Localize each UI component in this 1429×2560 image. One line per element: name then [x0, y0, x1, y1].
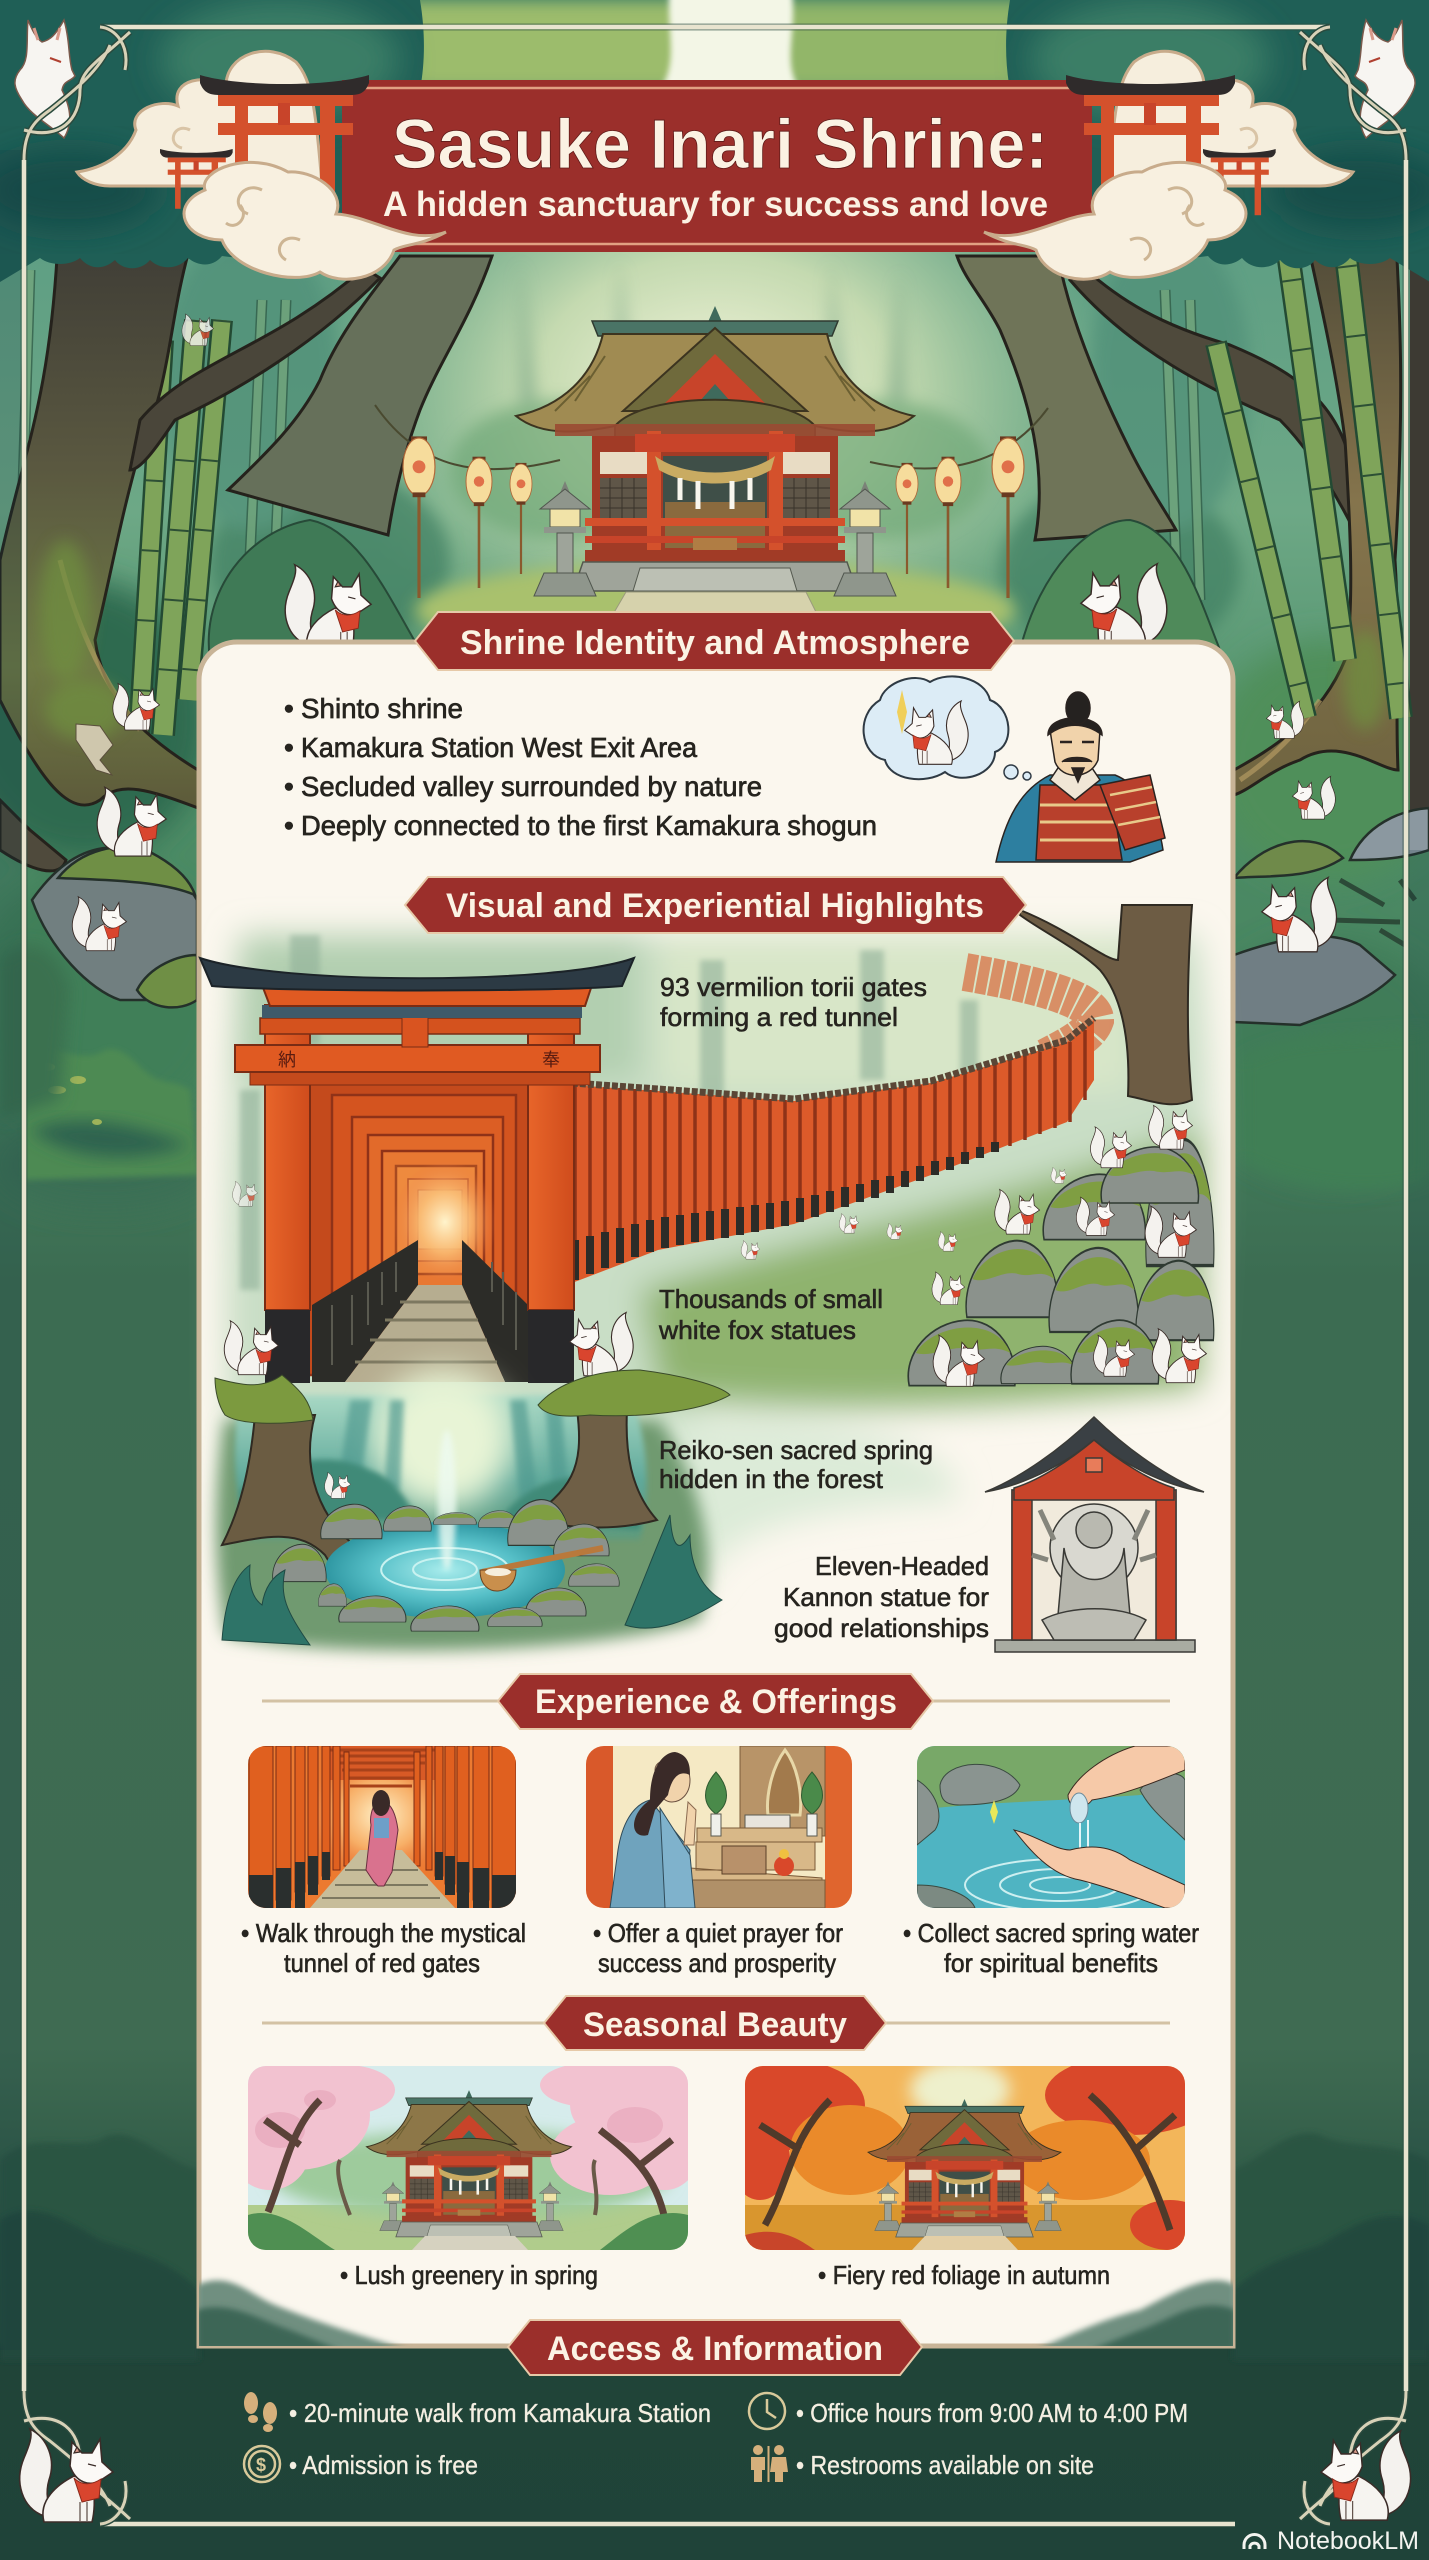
big torii gate and tunnel entrance [200, 958, 634, 1383]
ground and bushes [0, 520, 1429, 1210]
top corner fox left [15, 20, 75, 138]
captions: seasonal: • Fiery red foliage in autumn [818, 2260, 1110, 2290]
panel: shrine identity list: Shinto shrine [301, 693, 463, 724]
title banner with clouds and torii [77, 51, 1353, 279]
bottom corner fox left [20, 2429, 113, 2522]
captions: experience: success and prosperity [598, 1948, 836, 1978]
heading: shrine identity: Shrine Identity and Atmosphere [460, 624, 970, 662]
misty forest backdrop [226, 935, 1209, 1590]
panel: shrine identity list: Secluded valley surrounded by nature [301, 771, 762, 802]
panel: shrine identity list: • [284, 810, 294, 841]
NotebookLM watermark: NotebookLM [1277, 2527, 1419, 2555]
callout: sacred spring: Reiko-sen sacred spring [659, 1435, 933, 1465]
captions: seasonal: • Lush greenery in spring [340, 2260, 598, 2290]
heading: access: Access & Information [547, 2330, 883, 2368]
callout: torii gates: forming a red tunnel [660, 1002, 898, 1032]
callout: fox statues: Thousands of small [659, 1284, 883, 1314]
kanji plaques on posts: 納 [278, 1050, 296, 1070]
icon: footprints [244, 2392, 277, 2432]
top corner fox right [1355, 20, 1415, 138]
upper canopy and light opening [0, 0, 1429, 282]
icon: samurai shogun [996, 692, 1165, 862]
callout: kannon: good relationships [774, 1613, 989, 1643]
trees [0, 200, 1429, 871]
far bamboo [18, 270, 1200, 640]
side rocks [32, 808, 1429, 1025]
callout: torii gates [660, 972, 927, 1032]
captions: experience: tunnel of red gates [284, 1948, 480, 1978]
highlights illustration [200, 905, 1214, 1652]
side foxes left [72, 314, 214, 951]
long red tunnel [572, 972, 1095, 1283]
heading: shrine identity [415, 612, 1014, 670]
heading: experience [262, 1674, 1170, 1729]
large tree right [1020, 905, 1192, 1104]
heading: access [508, 2320, 922, 2375]
shrine main hall [516, 306, 914, 591]
callout: kannon: Eleven-Headed [815, 1551, 989, 1581]
heading: visual highlights: Visual and Experiential Highlights [446, 887, 984, 925]
captions: experience: for spiritual benefits [944, 1948, 1158, 1978]
heading: seasonal beauty [262, 1996, 1170, 2050]
text: restrooms: • Restrooms available on site [796, 2450, 1094, 2480]
callout: kannon: Kannon statue for [783, 1582, 989, 1612]
side foxes right [1262, 701, 1336, 952]
icon: coin: $ [256, 2455, 266, 2475]
heading: seasonal beauty: Seasonal Beauty [583, 2006, 847, 2044]
callout: sacred spring: hidden in the forest [659, 1464, 884, 1494]
captions: experience: • Collect sacred spring water [903, 1918, 1199, 1948]
stone lanterns [534, 481, 896, 596]
title text: Sasuke Inari Shrine: [392, 105, 1048, 183]
panel: shrine identity list: • [284, 732, 294, 763]
kannon statue shrine [985, 1417, 1204, 1652]
mossy boulders [908, 1139, 1214, 1386]
callout: fox statues [658, 1284, 883, 1345]
icon: coin [244, 2446, 280, 2482]
text: admission: • Admission is free [289, 2450, 478, 2480]
stone path [612, 592, 818, 616]
subtitle text: A hidden sanctuary for success and love [383, 185, 1048, 224]
callout: kannon [774, 1551, 989, 1643]
icon: clock [749, 2393, 785, 2429]
icon: thought bubble with white fox [864, 676, 1031, 780]
bottom corner fox right [1321, 2431, 1410, 2520]
panel: shrine identity list: Deeply connected to the first Kamakura shogun [301, 810, 877, 841]
NotebookLM watermark [1234, 2527, 1429, 2560]
captions: experience: • Walk through the mystical [241, 1918, 526, 1948]
captions: experience [241, 1918, 1199, 1978]
heading: visual highlights [405, 877, 1026, 933]
moss on trunk [39, 540, 1387, 740]
panel: shrine identity list: • [284, 693, 294, 724]
heading: experience: Experience & Offerings [535, 1683, 897, 1721]
image: walking through tunnel [248, 1745, 516, 1908]
fox guardians by shrine [285, 564, 1167, 650]
captions: experience: • Offer a quiet prayer for [593, 1918, 843, 1948]
panel: shrine identity list [284, 693, 877, 841]
callout: torii gates: 93 vermilion torii gates [660, 972, 927, 1002]
panel: shrine identity list: • [284, 771, 294, 802]
callout: sacred spring [659, 1435, 933, 1494]
panel: shrine identity list: Kamakura Station West Exit Area [301, 732, 697, 763]
image: autumn shrine [745, 2066, 1185, 2250]
image: quiet prayer [586, 1746, 852, 1908]
text: walk: • 20-minute walk from Kamakura Station [289, 2398, 711, 2428]
callout: fox statues: white fox statues [658, 1315, 856, 1345]
bamboo left [139, 320, 222, 735]
text: office hours: • Office hours from 9:00 AM to 4:00 PM [796, 2398, 1188, 2428]
paper lanterns with rope [375, 405, 1048, 598]
captions: seasonal [340, 2260, 1110, 2290]
main parchment panel [197, 642, 1235, 2350]
icon: restrooms [751, 2445, 788, 2482]
sacred spring scene [215, 1370, 730, 1651]
bamboo right [1216, 196, 1401, 718]
big torii gate and tunnel entrance: 奉 [542, 1050, 560, 1070]
image: sacred spring water [917, 1746, 1185, 1911]
image: spring shrine [248, 2066, 688, 2250]
small fox statues [224, 1105, 1206, 1386]
